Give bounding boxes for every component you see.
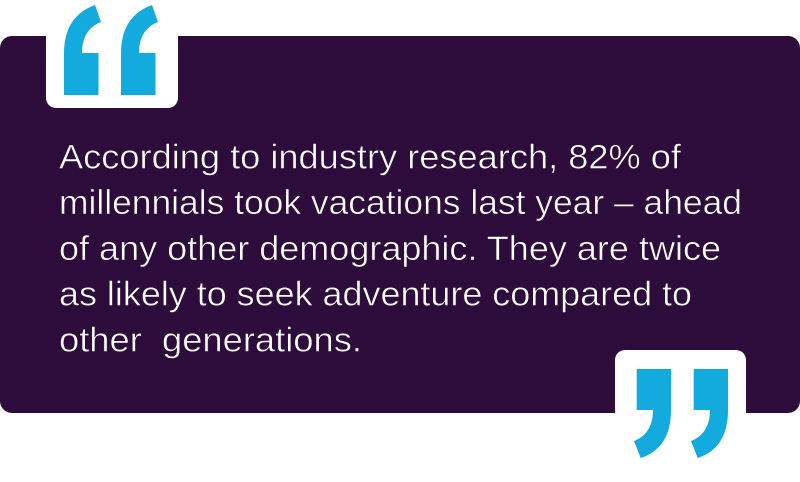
quote text [59,138,742,359]
panel: top quote mark tab [46,36,178,108]
quote text: other generations. [59,321,362,359]
icon: opening quotation mark [64,5,158,95]
quote text: According to industry research, 82% of [59,138,681,176]
quote text: of any other demographic. They are twice [59,230,721,268]
panel: quote background [0,36,800,413]
quote text: as likely to seek adventure compared to [59,276,692,314]
quote text: millennials took vacations last year – ahead [59,184,742,222]
panel: bottom quote mark tab [615,350,746,463]
icon: closing quotation mark [634,369,728,458]
